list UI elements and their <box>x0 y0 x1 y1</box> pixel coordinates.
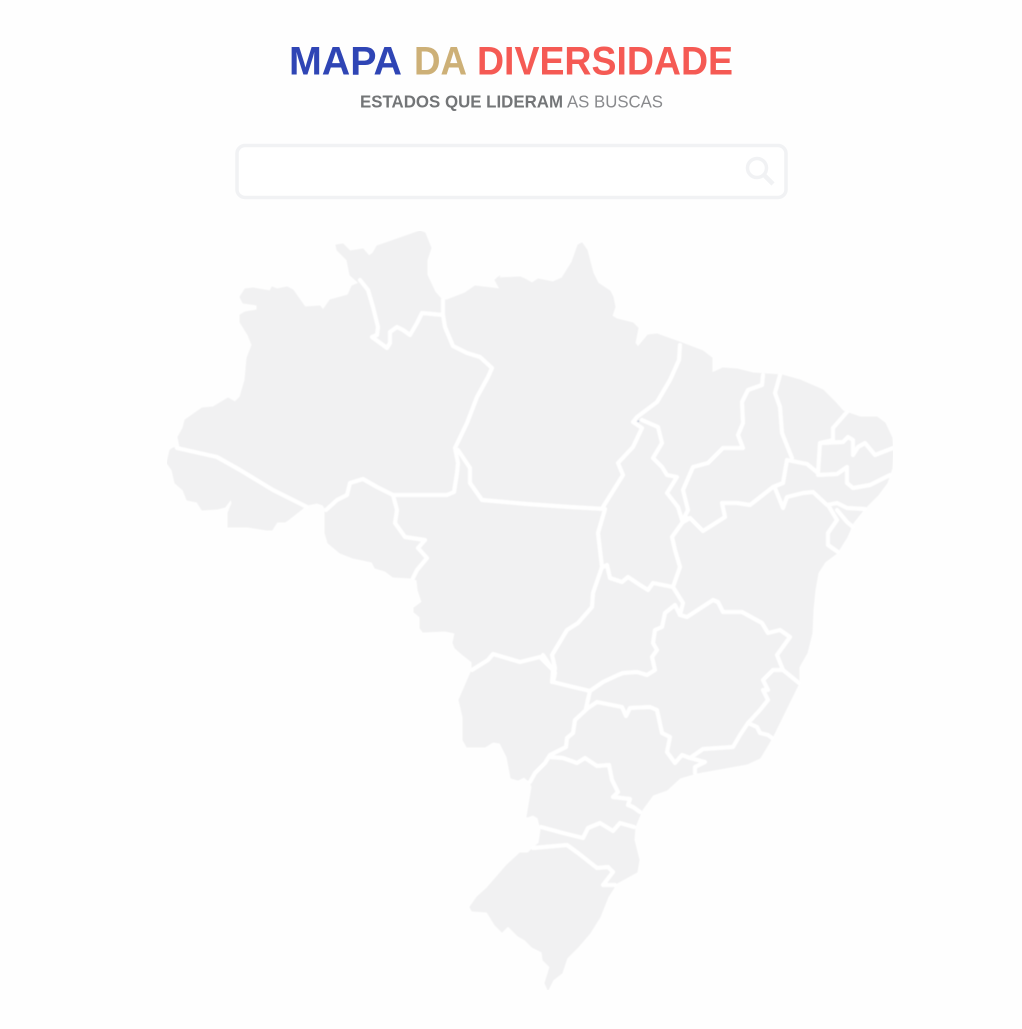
search box <box>237 146 786 198</box>
country silhouette <box>167 231 893 990</box>
title: MAPA <box>289 40 402 84</box>
subtitle: ESTADOS QUE LIDERAM <box>360 92 563 112</box>
speck in map <box>638 420 639 422</box>
subtitle: AS BUSCAS <box>567 92 663 112</box>
subtitle <box>360 92 663 112</box>
map of Brazil <box>167 231 893 990</box>
title: DA <box>414 40 467 84</box>
icon: magnifier <box>748 158 773 184</box>
title: DIVERSIDADE <box>477 40 733 84</box>
state borders <box>177 280 893 885</box>
title <box>289 40 733 84</box>
